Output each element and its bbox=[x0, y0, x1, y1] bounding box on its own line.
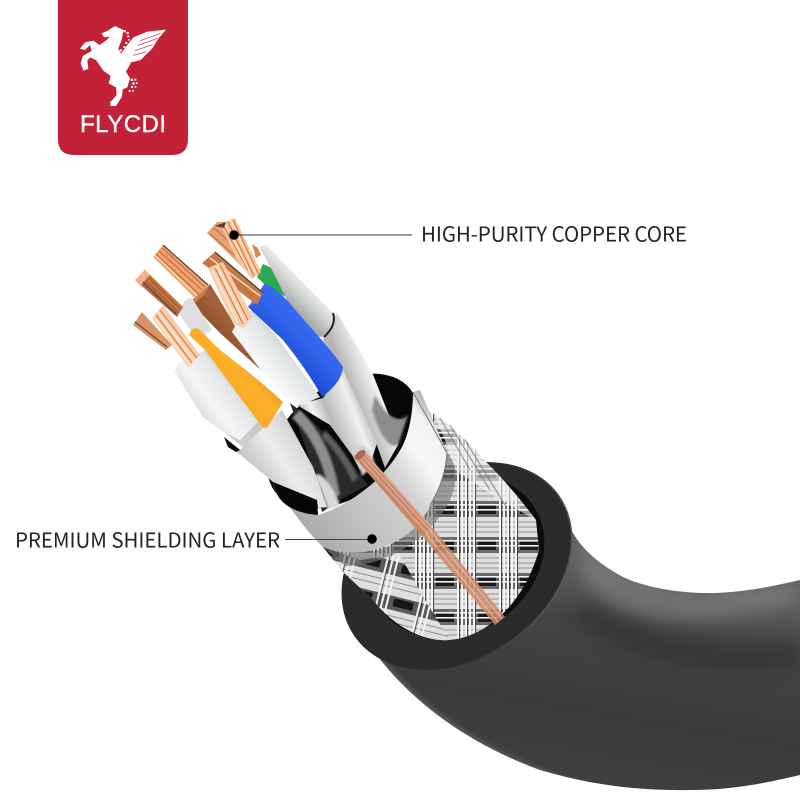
silver pair foil left bbox=[227, 410, 327, 508]
wire: brown insulation bbox=[190, 284, 272, 380]
wire: orange insulation bbox=[189, 328, 283, 428]
callout: copper core bbox=[229, 218, 687, 248]
wire: white center bbox=[232, 310, 320, 405]
inner conductors bbox=[133, 218, 408, 512]
logo wordmark: FLYCDI bbox=[80, 111, 166, 138]
copper: center cores bbox=[202, 252, 263, 328]
copper top-right back strand bbox=[252, 244, 261, 258]
cable jacket bbox=[370, 520, 800, 790]
icon: pegasus bbox=[80, 26, 166, 106]
copper: lower-left core bbox=[133, 305, 200, 367]
copper: top core bbox=[207, 218, 261, 279]
wire: white top-right bbox=[260, 245, 335, 337]
copper: far left core bbox=[135, 270, 183, 317]
wire: white left small bbox=[180, 298, 212, 340]
wire: green insulation bbox=[257, 264, 288, 298]
drain wire bbox=[353, 448, 505, 625]
wire: white front-left bbox=[175, 350, 263, 447]
silver pair foil right bbox=[323, 313, 398, 468]
foil interior bbox=[242, 346, 444, 536]
wire: blue insulation bbox=[248, 283, 343, 397]
copper: long left core bbox=[153, 245, 208, 298]
logo badge bbox=[58, 0, 188, 155]
foil shield layer bbox=[242, 346, 447, 553]
braided shield bbox=[323, 410, 539, 640]
cable end ring bbox=[303, 420, 611, 712]
grey reflections in interior bbox=[290, 403, 368, 512]
silver pair foil middle bbox=[297, 370, 377, 470]
callout: copper core: HIGH-PURITY COPPER CORE bbox=[421, 218, 687, 248]
callout: shielding layer: PREMIUM SHIELDING LAYER bbox=[15, 524, 280, 554]
